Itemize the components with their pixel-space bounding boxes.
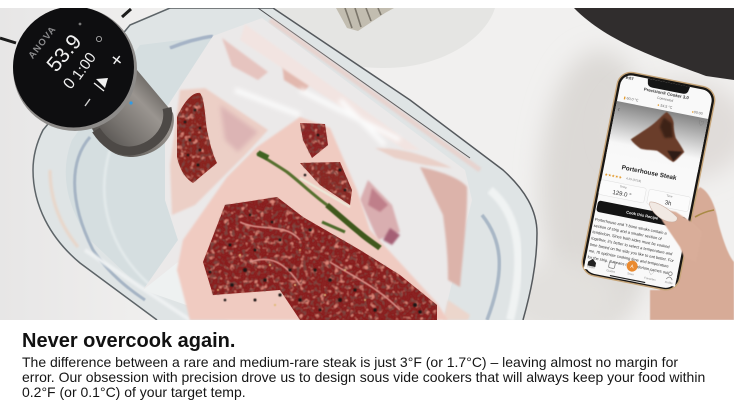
cook button: Cook this Recipe <box>626 209 659 221</box>
marble background <box>362 8 734 320</box>
recipe photo panel: ♡ <box>697 119 705 128</box>
sous vide cooker <box>0 6 174 157</box>
bottom navigation: Guides <box>606 268 616 274</box>
time box: Time <box>666 193 673 199</box>
app header: ▮ 60.0 °C <box>623 96 639 103</box>
temp box: 129.0 ° <box>612 190 632 200</box>
app header: Connected <box>657 96 674 103</box>
bottom navigation: Favorites <box>644 276 657 282</box>
temp box <box>598 179 647 203</box>
white plate at top <box>275 8 495 68</box>
rating: ★★★★★ <box>604 172 623 180</box>
back steak <box>170 88 268 215</box>
glass container <box>33 8 537 320</box>
body text <box>22 354 705 400</box>
bottom navigation: ♡ <box>647 268 655 277</box>
smartphone <box>580 70 717 292</box>
rating <box>604 173 641 183</box>
recipe description: me, I'll optimize cooking time and temperature <box>588 248 670 269</box>
hand behind phone <box>650 187 734 320</box>
recipe title: Porterhouse Steak <box>621 164 677 182</box>
dial readout: 0 <box>60 75 79 93</box>
recipe description: together, it's better to select a temperature and <box>591 235 673 256</box>
app header: ●00:00 <box>691 110 703 116</box>
bottom navigation: Home <box>587 264 596 270</box>
notch <box>646 79 690 95</box>
app header <box>624 76 703 115</box>
rosemary sprig <box>257 153 380 248</box>
dial readout: ANOVA <box>26 24 59 61</box>
cooker steel body <box>90 70 174 157</box>
pepper speckles <box>209 134 422 314</box>
heading: Never overcook again. <box>22 330 235 352</box>
power cord <box>0 9 131 43</box>
recipe description: tenderloin. Since both sides must be cooked <box>592 229 670 249</box>
dial readout: + <box>105 49 130 72</box>
body text: The difference between a rare and medium-rare steak is just 3°F (or 1.7°C) – leaving almost no margin for <box>22 354 678 370</box>
body text: 0.2°F (or 0.1°C) of your target temp. <box>22 384 246 400</box>
dial readout: 1:00 <box>69 50 100 83</box>
app header: 9:07 <box>625 75 635 81</box>
bottom navigation: A <box>630 264 635 270</box>
temp box: Temp <box>620 184 628 190</box>
bottom navigation <box>584 258 677 287</box>
cook button <box>596 200 686 226</box>
dial readout <box>29 22 121 106</box>
dial readout: 53.9 <box>42 30 86 76</box>
front steak <box>177 117 448 320</box>
time box: 3h <box>664 200 672 207</box>
recipe description <box>588 218 674 274</box>
control dial <box>13 6 137 131</box>
recipe description: for the strip. It means my tenderloin comes out <box>587 254 670 275</box>
recipe photo panel: ‹ <box>617 104 621 114</box>
recipe description: section of strip and a smaller section of <box>593 223 663 241</box>
finger and ring over phone <box>650 202 714 262</box>
app header: ● 54.5 °C <box>657 103 673 110</box>
bottom navigation: Store <box>627 271 635 277</box>
striped towel <box>336 8 394 31</box>
app header: Precision® Cooker 3.0 <box>643 87 690 100</box>
bottom navigation: Profile <box>664 280 673 285</box>
dark counter corner <box>574 8 734 80</box>
recipe description: Porterhouse and T-bone steaks contain a <box>595 217 668 236</box>
recipe description: time based on the side you like to eat better. For <box>590 242 675 263</box>
phone screen <box>583 74 714 290</box>
body text: error. Our obsession with precision drove us to design sous vide cookers that will always keep your food within <box>22 369 705 385</box>
rating: 4.29 (2216) <box>626 176 642 183</box>
time box <box>647 189 691 212</box>
recipe photo panel <box>606 101 708 173</box>
vacuum bag <box>143 18 472 320</box>
photo: sous vide cooker, steaks and phone app <box>0 8 734 320</box>
